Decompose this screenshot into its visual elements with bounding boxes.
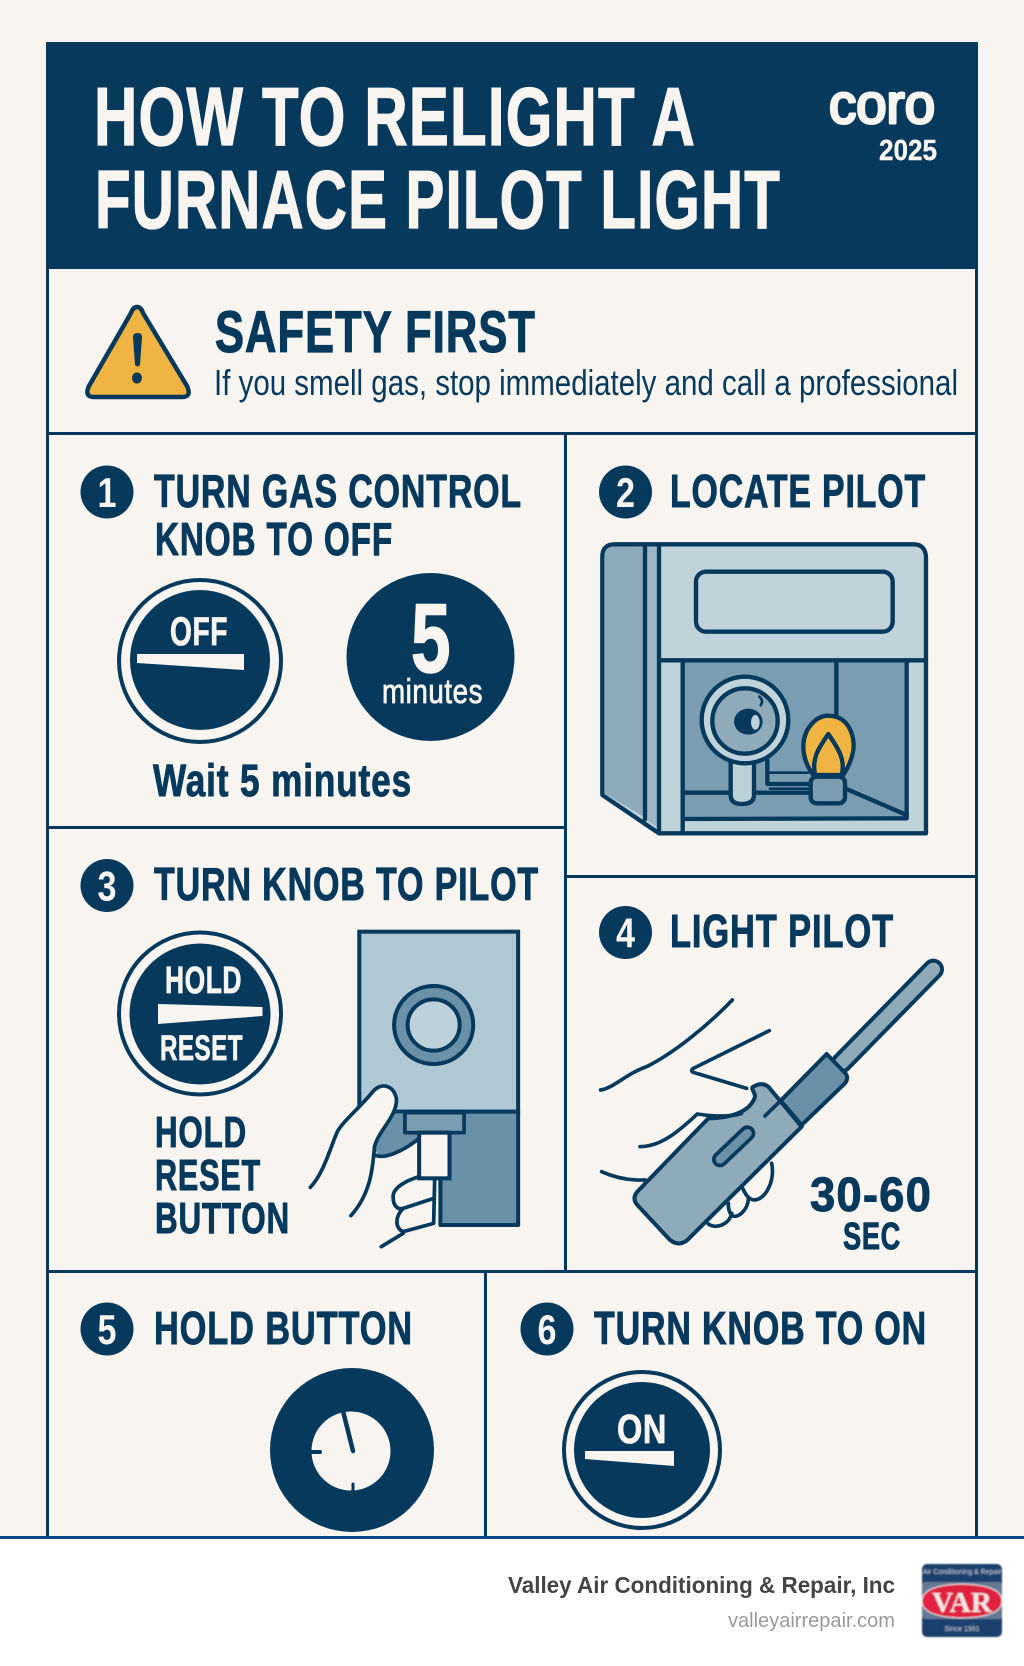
step 5 heading: HOLD BUTTON bbox=[154, 1302, 413, 1354]
year: 2025 bbox=[879, 135, 937, 167]
footer bbox=[0, 1536, 1024, 1666]
step 5 badge: 5 bbox=[98, 1306, 116, 1353]
website: valleyairrepair.com bbox=[728, 1610, 895, 1632]
company logo: VAR bbox=[932, 1588, 993, 1619]
company logo: Air Conditioning & Repair bbox=[923, 1569, 1002, 1576]
title bbox=[94, 70, 781, 246]
panel grid lines bbox=[46, 266, 978, 1538]
time 30-60 sec bbox=[810, 1169, 932, 1258]
hold reset button text: HOLD bbox=[155, 1108, 247, 1157]
title: HOW TO RELIGHT A bbox=[94, 70, 696, 163]
step 1 heading: TURN GAS CONTROL bbox=[154, 465, 522, 517]
company logo: Since 1981 bbox=[944, 1626, 980, 1633]
time 30-60 sec: 30-60 bbox=[810, 1169, 932, 1222]
step 1 badge bbox=[80, 466, 134, 518]
step 2 badge: 2 bbox=[616, 469, 635, 516]
panel: header bbox=[46, 42, 978, 268]
step 3 badge bbox=[80, 859, 134, 912]
time 30-60 sec: SEC bbox=[843, 1216, 901, 1258]
step 4 badge bbox=[599, 906, 652, 959]
panel: safety first bbox=[87, 300, 958, 403]
step 2 badge bbox=[599, 466, 652, 518]
icon: furnace with pilot bbox=[602, 544, 926, 833]
icon: hold reset knob: RESET bbox=[160, 1029, 243, 1068]
panel: step 6 bbox=[520, 1302, 927, 1528]
step 1 badge: 1 bbox=[98, 469, 116, 516]
icon: 5 minutes timer bbox=[346, 573, 514, 741]
panel: step 4 bbox=[599, 905, 933, 1258]
icon: knob off: OFF bbox=[170, 610, 228, 654]
hold reset button text bbox=[155, 1108, 290, 1243]
icon: knob on: ON bbox=[617, 1406, 667, 1452]
brand logo: coro bbox=[829, 72, 935, 135]
step 2 heading: LOCATE PILOT bbox=[670, 465, 926, 517]
step 4 badge: 4 bbox=[616, 910, 636, 956]
wait text: Wait 5 minutes bbox=[153, 755, 412, 806]
step 6 badge: 6 bbox=[538, 1306, 556, 1353]
icon: knob on bbox=[564, 1372, 720, 1528]
icon: hold reset knob: HOLD bbox=[165, 960, 242, 1002]
step 1 heading: KNOB TO OFF bbox=[155, 513, 393, 565]
hold reset button text: BUTTON bbox=[155, 1194, 290, 1243]
icon: hold reset knob bbox=[119, 932, 281, 1094]
panel: step 5 bbox=[80, 1302, 434, 1532]
icon: timer dial bbox=[270, 1368, 434, 1532]
panel: step 2 bbox=[599, 465, 926, 833]
hold reset button text: RESET bbox=[155, 1151, 261, 1200]
icon: knob off bbox=[119, 580, 281, 742]
safety heading: SAFETY FIRST bbox=[215, 300, 536, 365]
icon: warning triangle bbox=[87, 307, 189, 397]
icon: 5 minutes timer: 5 bbox=[411, 583, 452, 693]
icon: 5 minutes timer: minutes bbox=[382, 673, 483, 711]
step 6 badge bbox=[520, 1302, 574, 1356]
step 4 heading: LIGHT PILOT bbox=[670, 905, 894, 957]
step 3 heading: TURN KNOB TO PILOT bbox=[154, 858, 539, 910]
company name: Valley Air Conditioning & Repair, Inc bbox=[508, 1572, 895, 1598]
panel: step 1 bbox=[80, 465, 522, 806]
icon: control with hand pressing button bbox=[310, 932, 518, 1247]
company logo bbox=[922, 1564, 1002, 1637]
step 3 badge: 3 bbox=[98, 862, 116, 910]
icon: lighter and hand bbox=[601, 969, 933, 1244]
step 5 badge bbox=[80, 1302, 134, 1356]
step 1 heading bbox=[154, 465, 522, 565]
panel: step 3 bbox=[80, 858, 539, 1247]
